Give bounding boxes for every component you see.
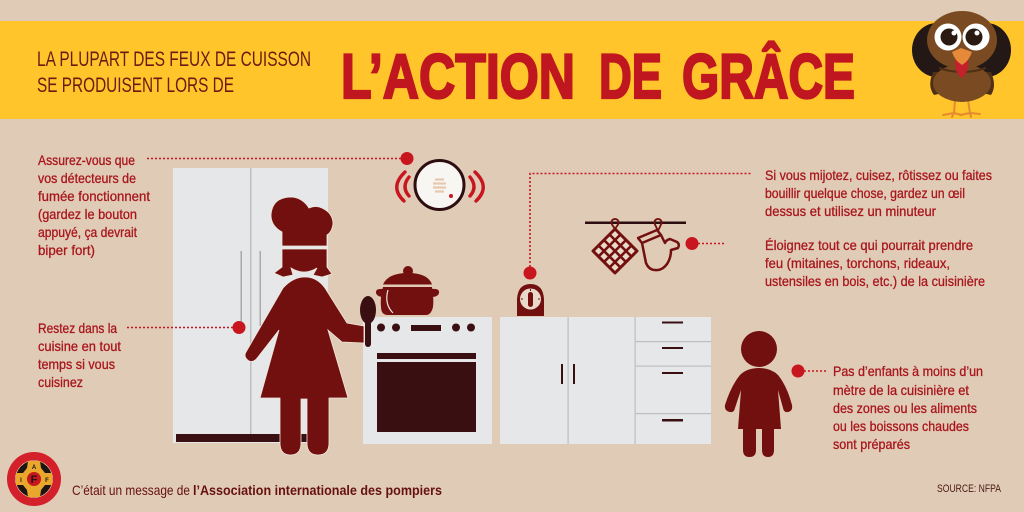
callout: stay in kitchen: Restez dans la — [38, 320, 117, 336]
callout: timer — [524, 167, 992, 280]
banner intro text: LA PLUPART DES FEUX DE CUISSON — [37, 48, 311, 71]
callout: children: des zones ou les aliments — [833, 400, 977, 416]
icon: firefighters association logo — [7, 452, 61, 506]
callout: stay in kitchen: temps si vous — [38, 356, 115, 372]
callout: children: Pas d’enfants à moins d’un — [833, 363, 983, 379]
footer message: l’Association internationale des pompiers — [193, 482, 442, 498]
title — [341, 41, 855, 112]
callout: smoke detectors: (gardez le bouton — [38, 206, 137, 222]
banner — [0, 21, 1024, 119]
icon: child — [725, 331, 792, 457]
callout: timer: bouillir quelque chose, gardez un œil — [765, 185, 965, 201]
callout: smoke detectors: vos détecteurs de — [38, 170, 136, 186]
callout: stay in kitchen: cuisine en tout — [38, 338, 121, 354]
callout: children: mètre de la cuisinière et — [833, 382, 969, 398]
icon: firefighters association logo: F — [45, 478, 49, 484]
callout: flammable items: feu (mitaines, torchons, rideaux, — [765, 255, 950, 271]
icon: oven mitt — [638, 230, 679, 270]
source: SOURCE: NFPA — [937, 483, 1002, 495]
title: L’ACTION — [341, 42, 575, 112]
callout: children — [792, 363, 983, 452]
panel: stove — [363, 317, 492, 444]
callout: stay in kitchen: cuisinez — [38, 374, 83, 390]
icon: pot — [376, 266, 439, 315]
icon: turkey — [912, 11, 1011, 117]
icon: firefighters association logo: I — [20, 478, 22, 484]
callout: smoke detectors: Assurez-vous que — [38, 152, 135, 168]
icon: woman cook — [245, 197, 364, 455]
banner intro text — [37, 48, 311, 97]
callout: flammable items: Éloignez tout ce qui pourrait prendre — [765, 237, 973, 253]
callout: children: ou les boissons chaudes — [833, 418, 969, 434]
panel: cabinets — [500, 317, 711, 444]
icon: firefighters association logo: F — [31, 474, 38, 486]
icon: smoke detector — [397, 160, 483, 210]
callout: children: sont préparés — [833, 436, 910, 452]
callout: smoke detectors: biper fort) — [38, 242, 95, 258]
banner intro text: SE PRODUISENT LORS DE — [37, 74, 234, 97]
icon: firefighters association logo: A — [32, 465, 37, 471]
callout: timer: dessus et utilisez un minuteur — [765, 203, 936, 219]
icon: utensil rack — [585, 219, 686, 273]
panel: fridge — [173, 168, 328, 443]
title: DE — [599, 42, 662, 112]
callout: timer: Si vous mijotez, cuisez, rôtissez ou faites — [765, 167, 992, 183]
icon: pot holder — [593, 229, 637, 273]
callout: smoke detectors — [38, 152, 414, 258]
title: GRÂCE — [682, 41, 855, 112]
callout: smoke detectors: appuyé, ça devrait — [38, 224, 137, 240]
icon: spoon — [360, 296, 376, 347]
callout: stay in kitchen — [38, 320, 246, 390]
footer message: C’était un message de — [72, 482, 190, 498]
icon: kitchen timer — [517, 284, 544, 316]
footer message — [72, 482, 442, 498]
callout: flammable items: ustensiles en bois, etc.) de la cuisinière — [765, 273, 985, 289]
callout: smoke detectors: fumée fonctionnent — [38, 188, 150, 204]
callout: flammable items — [686, 237, 985, 289]
